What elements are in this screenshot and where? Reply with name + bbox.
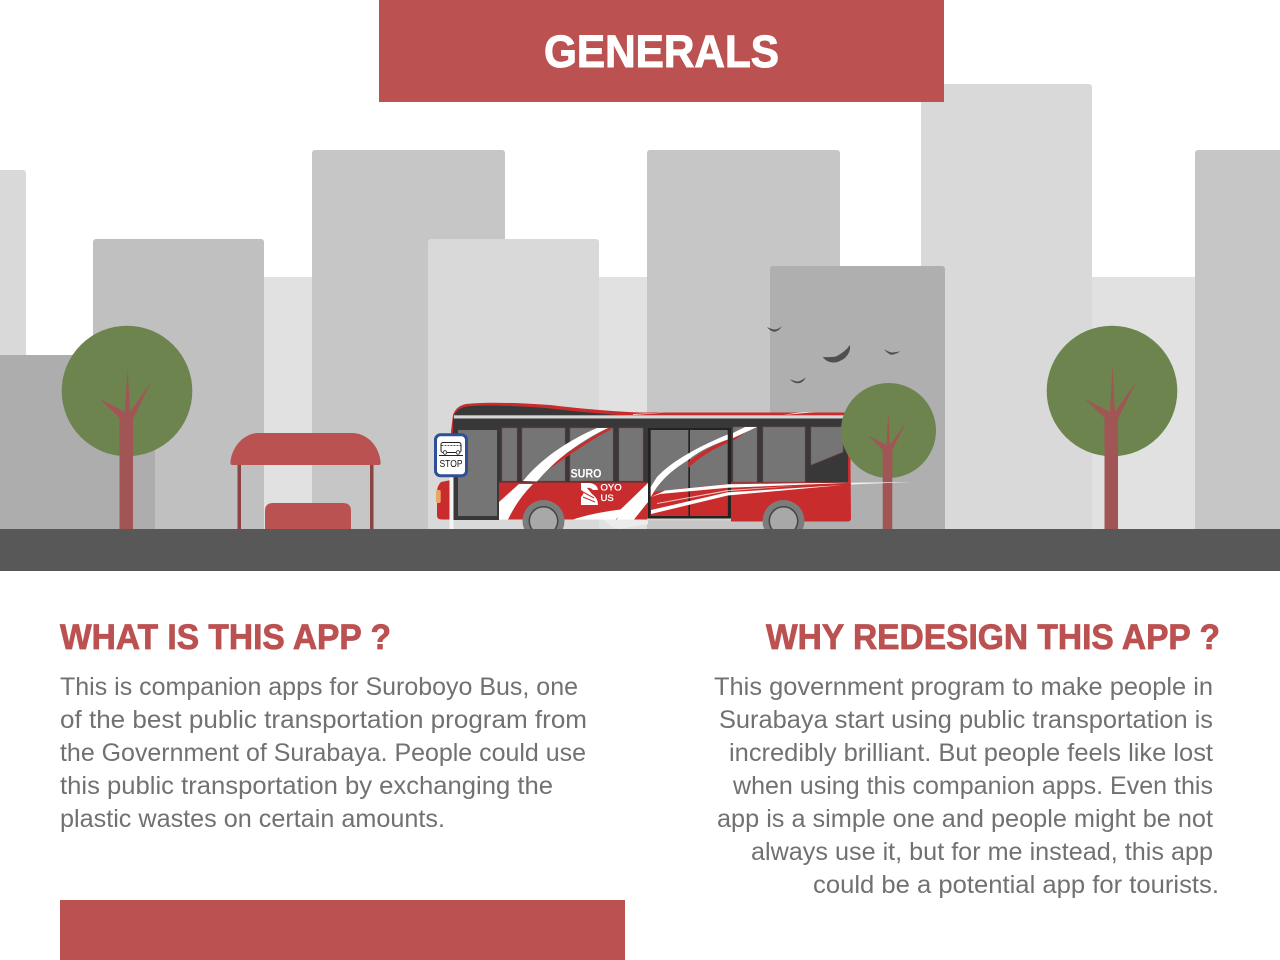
bus streak tail — [851, 482, 912, 484]
bus white swooshes — [499, 412, 851, 520]
bus lettering: US — [600, 493, 614, 504]
bus lettering: OYO — [600, 482, 622, 494]
body text: what is this app: This is companion apps for Suroboyo Bus, one — [60, 673, 578, 701]
birds — [767, 326, 900, 383]
door lower red panels — [528, 428, 745, 516]
panel: why redesign this app — [714, 618, 1220, 899]
panel: what is this app — [60, 618, 587, 833]
bus front wheel — [522, 500, 564, 542]
body text: why redesign this app: Surabaya start using public transportation is — [719, 706, 1213, 734]
bus logo — [581, 483, 598, 505]
bus shelter — [230, 433, 381, 530]
body text: why redesign this app — [714, 673, 1219, 899]
skyline buildings — [0, 84, 1280, 540]
city illustration — [0, 84, 1280, 571]
body text: what is this app: the Government of Surabaya. People could use — [60, 739, 586, 767]
tree: small centre — [841, 383, 936, 530]
pale ground glare under bus — [602, 519, 648, 529]
body text: why redesign this app: This government program to make people in — [714, 673, 1213, 701]
title: GENERALS — [544, 26, 779, 77]
bus windows — [458, 427, 843, 516]
heading: what is this app: WHAT IS THIS APP ? — [60, 618, 391, 657]
body text: why redesign this app: always use it, but for me instead, this app — [751, 838, 1213, 866]
body text: what is this app — [60, 673, 587, 833]
tree: left — [62, 326, 192, 530]
body text: what is this app: this public transportation by exchanging the — [60, 772, 553, 800]
bus — [436, 403, 851, 542]
road — [0, 529, 1280, 571]
header banner — [379, 0, 944, 102]
body text: why redesign this app: incredibly brilliant. But people feels like lost — [729, 739, 1213, 767]
bus body — [437, 403, 851, 522]
bus lettering — [570, 466, 622, 505]
bus lettering: SURO — [570, 466, 602, 480]
body text: why redesign this app: when using this companion apps. Even this — [732, 772, 1213, 800]
body text: why redesign this app: app is a simple one and people might be not — [717, 805, 1213, 833]
bus stop sign: STOP — [440, 459, 463, 470]
body text: why redesign this app: could be a potential app for tourists. — [813, 871, 1219, 899]
body text: what is this app: of the best public transportation program from — [60, 706, 587, 734]
body text: what is this app: plastic wastes on certain amounts. — [60, 805, 445, 833]
bus stop sign — [436, 435, 466, 530]
heading: why redesign this app: WHY REDESIGN THIS APP ? — [766, 618, 1220, 657]
bus headlight — [436, 490, 441, 503]
tree: right — [1047, 326, 1177, 530]
bus rear wheel — [762, 500, 804, 542]
bottom banner — [60, 900, 625, 960]
